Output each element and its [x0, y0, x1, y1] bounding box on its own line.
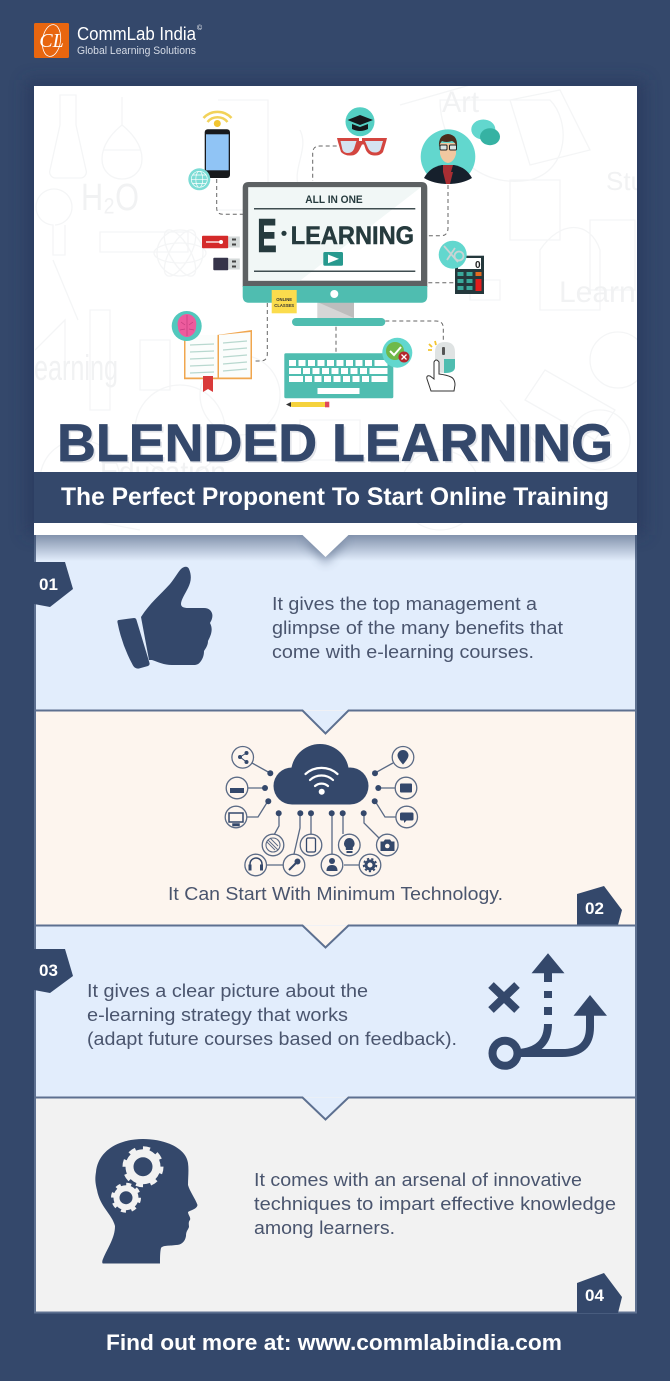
badge 03 [34, 949, 73, 993]
sticky note [272, 290, 297, 313]
monitor [243, 182, 427, 326]
background doodles: H₂O [81, 177, 139, 219]
text block [87, 980, 457, 1049]
screen text [254, 194, 415, 272]
text block: glimpse of the many benefits that [272, 617, 563, 638]
icon: pencil [286, 402, 329, 407]
subtitle band [34, 472, 637, 523]
sticky note: ONLINE [276, 297, 292, 302]
icon: thumbs up [117, 567, 212, 669]
text block: It comes with an arsenal of innovative [254, 1169, 582, 1190]
text block: It gives the top management a [272, 593, 538, 614]
icon: head with gears [95, 1139, 198, 1264]
text block: e-learning strategy that works [87, 1004, 348, 1025]
logo: © [197, 24, 203, 32]
text block: techniques to impart effective knowledge [254, 1193, 616, 1214]
icon: tools and calculator: 0 [475, 260, 481, 271]
icon: play button [323, 252, 343, 266]
icon: tools and calculator [439, 241, 484, 294]
caption: It Can Start With Minimum Technology. [168, 883, 503, 904]
icon: open book with brain [172, 311, 252, 392]
icon: USB drives [202, 236, 240, 270]
panel 3: strategy [34, 925, 637, 1097]
cloud [274, 744, 368, 804]
icon: strategy arrows [491, 953, 607, 1066]
background doodles: Art [442, 86, 480, 119]
network glyphs [229, 750, 414, 871]
background doodles [20, 85, 646, 530]
badge 04: 04 [585, 1286, 604, 1305]
background doodles: Education [100, 456, 226, 489]
badge 02: 02 [585, 899, 604, 918]
icon: hand on mouse [427, 341, 455, 391]
logo: CL [39, 30, 64, 52]
icon: teacher avatar with speech bubbles [421, 120, 500, 184]
badge 01 [34, 562, 73, 607]
text block: among learners. [254, 1217, 395, 1238]
subtitle band: The Perfect Proponent To Start Online Training [61, 483, 609, 511]
footer: Find out more at: www.commlabindia.com [106, 1330, 562, 1355]
screen text: LEARNING [291, 222, 414, 250]
text block [254, 1169, 616, 1238]
screen text: ALL IN ONE [305, 194, 363, 206]
background doodles: Stu [606, 166, 645, 196]
badge 01: 01 [39, 575, 58, 594]
logo: CommLab India [77, 24, 197, 44]
dashed connectors [217, 146, 455, 361]
text block: (adapt future courses based on feedback). [87, 1028, 457, 1049]
logo [34, 23, 203, 58]
badge 03: 03 [39, 961, 58, 980]
badge 02 [577, 886, 622, 925]
panel 2: technology [34, 710, 637, 925]
screen text: E [258, 210, 276, 262]
sticky note: CLASSES [274, 303, 294, 308]
panel 4: knowledge [34, 1097, 637, 1313]
text block: come with e-learning courses. [272, 641, 534, 662]
badge 04 [577, 1273, 622, 1313]
icon: cloud network [225, 744, 418, 876]
panel: hero [20, 85, 646, 535]
logo: Global Learning Solutions [77, 45, 196, 57]
title: BLENDED LEARNING [59, 416, 615, 475]
text block [272, 593, 563, 662]
icon: phone with wifi [188, 112, 232, 190]
background doodles: Learn [559, 276, 636, 309]
background doodles: Learning [20, 347, 118, 388]
icon: keyboard [284, 338, 412, 398]
text block: It gives a clear picture about the [87, 980, 368, 1001]
title: BLENDED LEARNING [57, 414, 613, 473]
panel 1: benefits [34, 535, 637, 711]
icon: graduation cap and glasses [337, 107, 387, 156]
